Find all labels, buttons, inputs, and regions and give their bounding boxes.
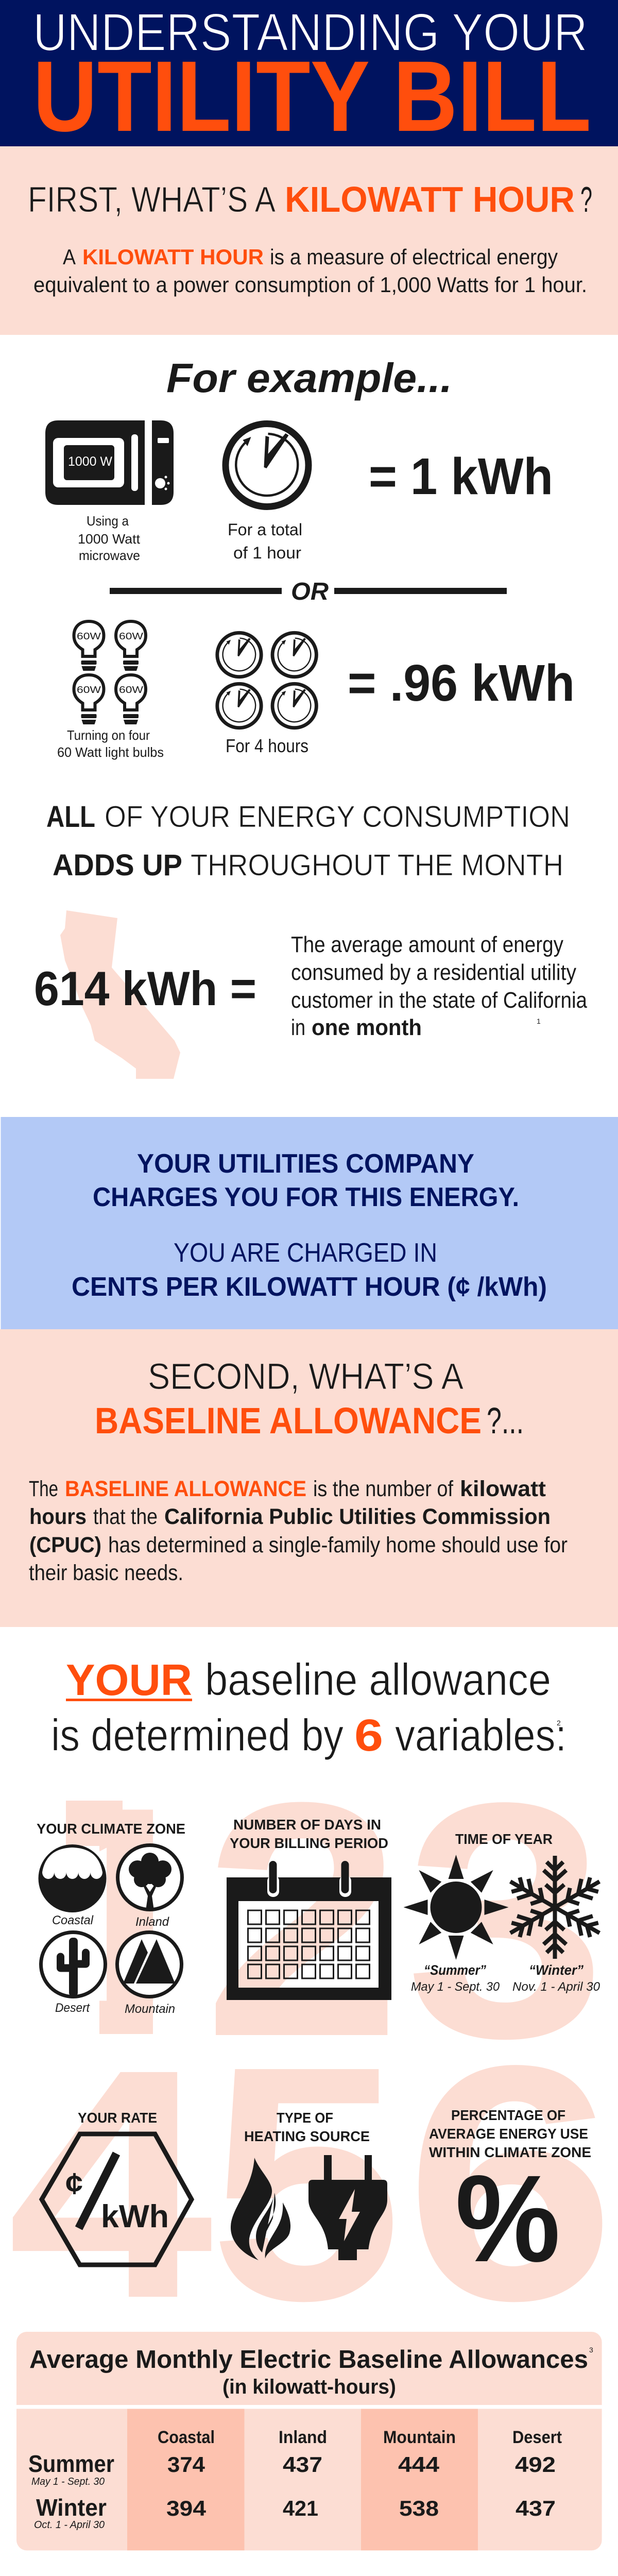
text: season dates: May 1 - Sept. 30 <box>411 1980 500 1994</box>
icon: cents per kWh hexagon: ¢ <box>65 2167 83 2200</box>
text: utilities company charges <box>93 1149 519 1212</box>
divider: or <box>110 578 507 605</box>
table row: summer: 374 <box>167 2452 205 2477</box>
table column headers: Desert <box>512 2428 562 2447</box>
text: bulbs caption <box>57 727 164 760</box>
icon: mountain: Mountain <box>125 2002 175 2016</box>
text: microwave caption: Using a <box>87 513 129 529</box>
background numerals 1 to 6: 6 <box>405 1996 616 2370</box>
variable 1: climate zone: YOUR CLIMATE ZONE <box>37 1821 185 1837</box>
panel: what is a baseline allowance <box>0 1329 618 1627</box>
text: microwave caption <box>78 513 141 563</box>
icon: four 60 watt bulbs: 60W <box>119 631 143 641</box>
table row: summer: May 1 - Sept. 30 <box>31 2476 105 2487</box>
text: baseline allowance definition: hours <box>29 1504 87 1529</box>
heading: kilowatt hour question: FIRST, WHAT’S A <box>28 179 276 219</box>
text: kilowatt hour definition: KILOWATT HOUR <box>82 245 264 269</box>
icon: coastal: Coastal <box>52 1913 94 1927</box>
icon: percent sign: % <box>455 2149 560 2287</box>
table row: summer: 437 <box>283 2452 322 2477</box>
variable 6: percentage of average use: PERCENTAGE OF <box>451 2107 565 2123</box>
heading: kilowatt hour question: ? <box>580 179 592 219</box>
variable 5: heating source: HEATING SOURCE <box>244 2128 370 2144</box>
icon: four 60 watt bulbs: 60W <box>77 685 101 695</box>
text: baseline allowance definition: California Public Utilities Commission <box>164 1504 551 1529</box>
text: bulbs caption: 60 Watt light bulbs <box>57 744 164 760</box>
text: clock caption: For a total <box>228 520 302 539</box>
heading: six variables: variables: <box>395 1710 566 1760</box>
table row: summer: 444 <box>398 2452 440 2477</box>
text: season dates: “Winter” <box>529 1962 583 1978</box>
background numerals 1 to 6: 1 <box>15 1739 233 2104</box>
text: baseline allowance definition <box>29 1477 568 1585</box>
variable 2: days in billing period: NUMBER OF DAYS IN <box>233 1817 381 1833</box>
icon: desert <box>41 1932 105 2015</box>
variable 2: days in billing period <box>227 1817 391 2000</box>
heading: baseline allowance question: BASELINE ALLOWANCE <box>95 1401 482 1442</box>
table title <box>29 2346 593 2398</box>
text: kilowatt hour definition: A <box>63 245 76 269</box>
heading: for example: For example... <box>166 355 452 401</box>
text: clock caption <box>228 520 302 562</box>
icon: four 60 watt bulbs: 60W <box>119 685 143 695</box>
text: cents per kilowatt hour <box>72 1238 547 1302</box>
heading: kilowatt hour question <box>28 179 592 219</box>
variable 3: time of year <box>404 1831 605 1994</box>
heading: baseline allowance question: SECOND, WHAT’S A <box>148 1357 464 1397</box>
icon: cents per kWh hexagon: kWh <box>101 2199 169 2234</box>
table title: 3 <box>589 2346 593 2354</box>
icon: four clocks <box>217 633 316 728</box>
heading: six variables <box>51 1655 566 1760</box>
icon: desert: Desert <box>55 2001 90 2015</box>
background numerals 1 to 6: 2 <box>203 1733 402 2106</box>
icon: sun <box>404 1855 509 1960</box>
variable 3: time of year: TIME OF YEAR <box>455 1831 553 1847</box>
table row: winter: 421 <box>283 2496 318 2520</box>
text: utilities company charges: YOUR UTILITIES COMPANY <box>137 1149 474 1179</box>
table row: winter: Winter <box>36 2494 107 2521</box>
result: point nine six kWh: = .96 kWh <box>348 654 575 712</box>
text: season dates <box>411 1962 600 1994</box>
text: cents per kilowatt hour: YOU ARE CHARGED IN <box>174 1238 437 1268</box>
variable 6: percentage of average use: WITHIN CLIMATE ZONE <box>429 2144 591 2160</box>
text: microwave caption: 1000 Watt <box>78 531 141 547</box>
text: season dates: “Summer” <box>424 1962 486 1978</box>
text: average consumption: The average amount of energy <box>291 932 563 957</box>
icon: inland: Inland <box>135 1915 169 1929</box>
icon: four 60 watt bulbs <box>74 621 146 724</box>
icon: gas flame <box>231 2158 290 2260</box>
heading: baseline allowance question: ?... <box>487 1401 524 1442</box>
text: kilowatt hour definition: is a measure of electrical energy <box>270 245 558 269</box>
text: kilowatt hour definition <box>33 245 587 297</box>
background numerals 1 to 6: 3 <box>405 1733 606 2107</box>
icon: coastal <box>38 1844 106 1927</box>
variable 4: your rate <box>42 2110 192 2265</box>
table row: winter <box>34 2494 556 2531</box>
text: baseline allowance definition: has determined a single-family home should use for <box>108 1533 568 1557</box>
text: baseline allowance definition: that the <box>93 1504 158 1529</box>
variable 1: climate zone <box>37 1821 185 2016</box>
icon: inland <box>117 1845 182 1929</box>
heading: energy adds up: OF YOUR ENERGY CONSUMPTION <box>105 800 570 834</box>
table row: summer: Summer <box>28 2450 114 2477</box>
table row: winter: Oct. 1 - April 30 <box>34 2519 105 2531</box>
text: clock caption: of 1 hour <box>233 544 301 562</box>
variable 6: percentage of average use: AVERAGE ENERGY USE <box>429 2126 588 2142</box>
icon: mountain <box>117 1932 181 2016</box>
table column headers: Coastal <box>158 2428 215 2447</box>
heading: energy adds up: THROUGHOUT THE MONTH <box>191 849 563 882</box>
background numerals 1 to 6: 5 <box>209 1997 402 2370</box>
text: utilities company charges: CHARGES YOU FOR THIS ENERGY. <box>93 1182 519 1212</box>
text: microwave caption: microwave <box>79 548 140 563</box>
text: baseline allowance definition: The <box>29 1477 58 1501</box>
stat: 614 kWh: 614 kWh = <box>34 961 256 1015</box>
heading: kilowatt hour question: KILOWATT HOUR <box>285 179 575 219</box>
text: baseline allowance definition: is the number of <box>313 1477 454 1501</box>
text: average consumption: consumed by a residential utility <box>291 960 576 985</box>
icon: microwave: 1000 W <box>68 454 112 469</box>
table row: summer <box>28 2450 556 2487</box>
heading: energy adds up: ALL <box>46 800 95 834</box>
variable 4: your rate: YOUR RATE <box>78 2110 157 2126</box>
header: title banner <box>0 0 618 152</box>
table column headers <box>158 2428 562 2447</box>
background numerals 1 to 6 <box>12 1801 603 2302</box>
text: cents per kilowatt hour: CENTS PER KILOWATT HOUR (¢ /kWh) <box>72 1272 547 1302</box>
table: average monthly baseline allowances <box>16 2332 602 2550</box>
heading: six variables: is determined by <box>51 1710 344 1760</box>
heading: energy adds up <box>46 800 570 882</box>
text: baseline allowance definition: (CPUC) <box>29 1533 101 1557</box>
icon: calendar <box>227 1861 391 2000</box>
icon: microwave <box>45 420 174 505</box>
text: average consumption <box>291 932 587 1040</box>
icon: cents per kWh hexagon <box>42 2134 192 2265</box>
table column headers: Inland <box>279 2428 327 2447</box>
table column headers: Mountain <box>383 2428 456 2447</box>
divider: or: OR <box>291 578 329 605</box>
icon: electric plug <box>308 2155 387 2260</box>
heading: six variables: 2 <box>557 1719 561 1727</box>
icon: four 60 watt bulbs: 60W <box>77 631 101 641</box>
table row: winter: 394 <box>166 2496 207 2520</box>
text: average consumption: one month <box>312 1015 422 1040</box>
table row: winter: 538 <box>399 2496 439 2520</box>
text: baseline allowance definition: their basic needs. <box>29 1561 183 1585</box>
background numerals 1 to 6: 4 <box>7 2002 216 2366</box>
text: baseline allowance definition: BASELINE ALLOWANCE <box>65 1477 306 1501</box>
heading: six variables: YOUR <box>66 1656 192 1705</box>
text: season dates: Nov. 1 - April 30 <box>512 1980 600 1994</box>
table title: Average Monthly Electric Baseline Allowances <box>29 2346 588 2374</box>
variable 5: heating source <box>231 2110 387 2260</box>
variable 6: percentage of average use <box>429 2107 591 2287</box>
table row: summer: 492 <box>515 2452 556 2477</box>
icon: california map <box>60 910 180 1079</box>
heading: baseline allowance question <box>95 1357 524 1442</box>
table title: (in kilowatt-hours) <box>222 2376 396 2398</box>
result: one kWh: = 1 kWh <box>369 448 553 505</box>
icon: clock one hour <box>226 423 308 507</box>
panel: what is a kilowatt hour <box>0 146 618 335</box>
text: average consumption: in <box>291 1015 305 1040</box>
panel: charged for energy <box>1 1117 618 1329</box>
text: average consumption: 1 <box>537 1017 541 1025</box>
variable 5: heating source: TYPE OF <box>277 2110 333 2126</box>
table row: winter: 437 <box>516 2496 556 2520</box>
heading: six variables: baseline allowance <box>205 1655 551 1705</box>
icon: snowflake <box>505 1856 605 1959</box>
variable 2: days in billing period: YOUR BILLING PERIOD <box>230 1835 388 1851</box>
heading: energy adds up: ADDS UP <box>53 849 182 882</box>
heading: six variables: 6 <box>354 1710 383 1760</box>
text: bulbs caption: Turning on four <box>67 727 150 743</box>
text: baseline allowance definition: kilowatt <box>460 1477 546 1501</box>
text: clocks caption: For 4 hours <box>226 735 308 756</box>
text: kilowatt hour definition: equivalent to a power consumption of 1,000 Watts for 1 hour. <box>33 273 587 297</box>
